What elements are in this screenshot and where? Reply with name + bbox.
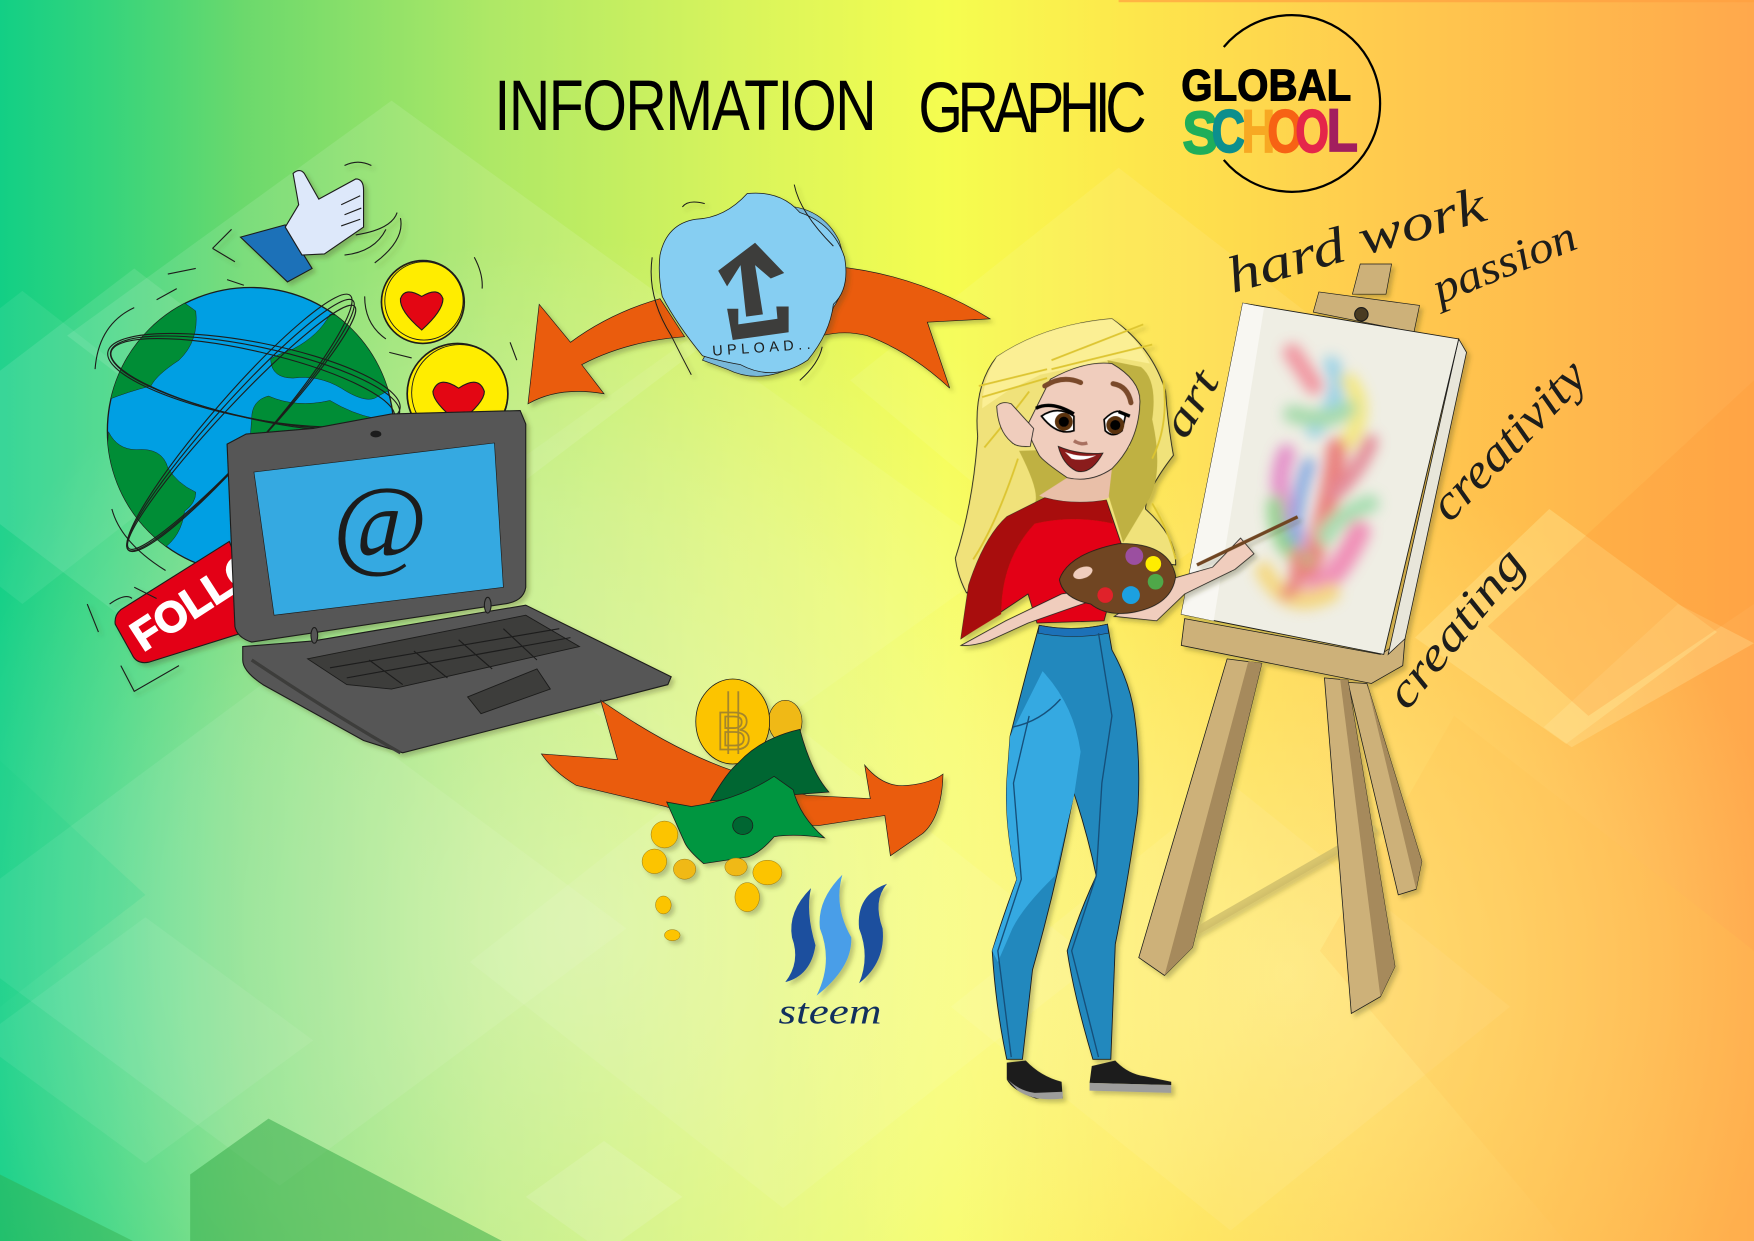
mouth [1058,446,1103,472]
icon: heart coin 2 [389,342,517,444]
painting [1264,352,1370,600]
logo: Global School: C [1211,97,1245,165]
neck [1039,469,1112,509]
title: INFORMATION [494,65,877,145]
left arm [961,590,1092,646]
bitcoin coin back [768,700,802,743]
right shoe [1090,1060,1171,1093]
arrow: artist to upload [822,266,990,388]
at sign: @ [333,466,428,580]
arrow: money [541,700,943,856]
ledge [1181,619,1405,683]
handwritten word: passion: passion [1422,211,1583,315]
top post [1352,264,1392,294]
steem label: steem [779,992,881,1032]
title [494,65,1147,147]
jeans [992,624,1139,1059]
logo: Global School: GLOBAL [1181,61,1351,111]
icon: heart coin 1 [365,257,482,343]
icon: upload cloud [651,185,846,380]
logo: Global School: H [1242,97,1275,165]
cross piece [1313,292,1420,332]
icon: laptop [227,411,671,753]
middle leg [1324,678,1395,1013]
top [961,498,1123,639]
left leg [1139,659,1262,975]
paintbrush [1197,517,1298,565]
arrow: upload to web [528,299,685,404]
hair back [955,319,1176,593]
logo: Global School: S [1182,98,1218,166]
right eye [1104,411,1130,435]
keyboard [308,615,579,689]
easel [1139,264,1467,1013]
handwritten word: art: art [1151,359,1230,446]
back bill [710,729,829,801]
bitcoin coin: B [716,701,752,761]
easel shadow [1191,828,1376,934]
handwritten word: hard work: hard work [1220,176,1493,305]
logo: Global School: L [1327,96,1358,164]
front bill [667,776,824,864]
eyebrows [1045,379,1131,403]
icon: thumbs up [213,162,401,282]
artist [955,319,1298,1099]
laptop base [243,605,671,753]
trackpad [468,669,550,714]
banner: follow [87,520,304,691]
left shoe [1006,1060,1063,1099]
banner: follow: FOLLOW [123,520,304,661]
logo: Global School [1181,15,1380,192]
logo: Global School: O [1295,97,1329,165]
handwritten word: creativity: creativity [1418,348,1598,531]
handwritten word: creating: creating [1375,538,1535,718]
icon: steem logo [785,875,887,996]
screen [254,443,503,615]
logo: Global School: O [1267,97,1303,165]
title: GRAPHIC [918,67,1147,147]
icon: coins and bills [642,679,829,941]
upload arrow [718,243,789,340]
right arm [1114,538,1254,621]
right leg [1348,682,1422,895]
face [1028,363,1140,479]
canvas [1181,303,1459,654]
icon: globe [89,268,407,574]
palette [1059,544,1176,614]
bitcoin coin [696,679,770,764]
left eye [1036,405,1074,432]
hair shadow [1019,360,1157,543]
upload label: UPLOAD.. [712,337,811,360]
canvas side [1388,339,1467,654]
ear [997,403,1034,447]
laptop lid [227,411,526,642]
